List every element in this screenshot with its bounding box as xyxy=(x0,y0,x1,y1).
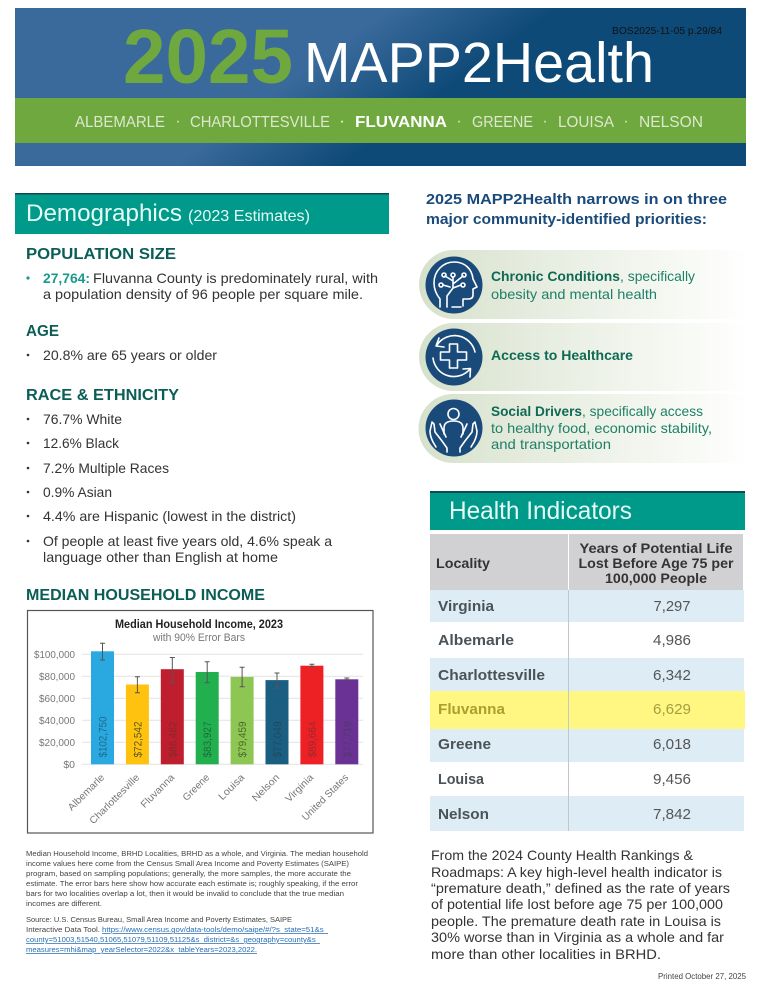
row: Fluvanna highlighted: Fluvanna xyxy=(438,701,506,718)
panel: chronic conditions priority: , specifically xyxy=(620,268,695,284)
panel: health indicators heading: Health Indicators xyxy=(449,497,632,525)
age section: AGE xyxy=(26,323,59,340)
title: MAPP2Health: MAPP2Health xyxy=(304,31,654,95)
bar value labels: $102,750 xyxy=(98,716,110,758)
locality band: · xyxy=(339,113,345,130)
row: Albemarle: 4,986 xyxy=(653,632,691,649)
category labels: Virginia xyxy=(284,772,316,805)
chart source: https://www.census.gov/data-tools/demo/saipe/#/?s_state=51&s_ xyxy=(102,925,329,934)
row: Louisa: 9,456 xyxy=(653,771,691,788)
panel: demographics heading: Demographics xyxy=(26,200,182,227)
text block: premature death explanation: 30% worse than in Virginia as a whole and far xyxy=(431,929,724,945)
population size section: 27,764: xyxy=(43,270,90,286)
bar chart: median household income: $20,000 xyxy=(39,737,75,749)
bar value labels: $89,664 xyxy=(307,722,319,758)
row: Greene: 6,018 xyxy=(653,736,691,753)
panel: chronic conditions priority: Chronic Conditions xyxy=(491,268,620,284)
locality band: · xyxy=(175,113,181,130)
age section xyxy=(26,323,217,363)
locality band: ALBEMARLE xyxy=(75,114,165,131)
bar chart: median household income: $100,000 xyxy=(34,649,75,661)
row: Charlottesville xyxy=(430,658,744,691)
panel: social drivers priority: to healthy food, economic stability, xyxy=(491,420,712,436)
bar value labels: $79,459 xyxy=(237,722,249,758)
chart source: Source: U.S. Census Bureau, Small Area Income and Poverty Estimates, SAIPE xyxy=(26,915,292,924)
category labels: Louisa xyxy=(217,772,247,803)
row: Albemarle: Albemarle xyxy=(438,632,514,649)
population size section: Fluvanna County is predominately rural, with xyxy=(93,270,378,286)
header banner xyxy=(15,8,746,166)
bar value labels xyxy=(98,716,354,758)
race and ethnicity section: 7.2% Multiple Races xyxy=(43,460,169,476)
panel: health indicators heading xyxy=(430,491,745,530)
chart source: Interactive Data Tool. xyxy=(26,925,100,934)
locality band: GREENE xyxy=(472,114,533,131)
race and ethnicity section: language other than English at home xyxy=(43,549,278,565)
bar chart: median household income: $40,000 xyxy=(39,715,75,727)
race and ethnicity section: 12.6% Black xyxy=(43,435,120,451)
bar value labels: $77,719 xyxy=(342,722,354,758)
chart footnote xyxy=(26,849,368,908)
row: Virginia xyxy=(430,590,744,622)
icon: medical cross with cycle arrows xyxy=(433,336,475,377)
table header xyxy=(430,534,743,590)
table: health indicators xyxy=(430,534,745,831)
error bars xyxy=(100,643,349,693)
print date: Printed October 27, 2025 xyxy=(658,972,747,981)
table header: Lost Before Age 75 per xyxy=(578,555,734,571)
race and ethnicity section xyxy=(26,387,332,565)
race and ethnicity section: RACE & ETHNICITY xyxy=(26,387,179,404)
locality band: · xyxy=(542,113,548,130)
category labels: Greene xyxy=(181,772,212,803)
text block: premature death explanation: more than other localities in BRHD. xyxy=(431,946,661,962)
population size section: POPULATION SIZE xyxy=(26,246,176,263)
priorities heading xyxy=(426,192,727,228)
row: Louisa: Louisa xyxy=(438,771,485,788)
panel: social drivers priority: and transportation xyxy=(491,436,611,452)
chart footnote: incomes are different. xyxy=(26,899,102,908)
panel: chronic conditions priority: obesity and mental health xyxy=(491,286,657,302)
panel: demographics heading: (2023 Estimates) xyxy=(188,208,310,225)
text block: premature death explanation: Roadmaps: A key high-level health indicator is xyxy=(431,864,722,880)
locality band: LOUISA xyxy=(558,114,614,131)
text block: premature death explanation: From the 2024 County Health Rankings & xyxy=(431,847,694,863)
priorities heading: 2025 MAPP2Health narrows in on three xyxy=(426,192,727,208)
row: Virginia: Virginia xyxy=(438,598,495,615)
text block: premature death explanation: people. The premature death rate in Louisa is xyxy=(431,913,721,929)
row: Greene xyxy=(430,729,744,762)
priorities heading: major community-identified priorities: xyxy=(426,212,707,228)
race and ethnicity section: 76.7% White xyxy=(43,411,122,427)
panel: demographics heading xyxy=(15,193,389,234)
title: 2025: 2025 xyxy=(123,14,293,100)
panel: chronic conditions priority xyxy=(419,250,762,319)
chart footnote: estimate. The error bars here show how accurate each estimate is; roughly speaking, if the error xyxy=(26,879,358,888)
race and ethnicity section: 0.9% Asian xyxy=(43,484,112,500)
icon: head with neural network xyxy=(434,262,477,307)
category labels: Charlottesville xyxy=(88,772,142,827)
bars xyxy=(91,651,358,764)
row: Greene: Greene xyxy=(438,736,491,753)
row: Albemarle xyxy=(430,622,744,658)
row: Nelson: 7,842 xyxy=(653,806,691,823)
table header: 100,000 People xyxy=(605,570,707,586)
document reference: BOS2025-11-05 p.29/84 xyxy=(612,26,722,37)
row: Charlottesville: 6,342 xyxy=(653,667,691,684)
locality band: · xyxy=(456,113,462,130)
locality band: · xyxy=(623,113,629,130)
chart source: measures=mhi&map_yearSelector=2022&x_tableYears=2023,2022. xyxy=(26,945,257,954)
chart footnote: program, based on sampling populations; generally, the more samples, the more accurate the xyxy=(26,869,351,878)
chart source xyxy=(26,915,329,954)
category labels: Fluvanna xyxy=(139,772,177,811)
category labels: Nelson xyxy=(250,772,282,804)
table header: Locality xyxy=(436,555,490,571)
row: Nelson xyxy=(430,796,744,831)
bar value labels: $72,542 xyxy=(132,722,144,758)
icon: person held in hands xyxy=(430,408,477,452)
locality band: FLUVANNA xyxy=(355,114,447,131)
population size section xyxy=(26,246,378,302)
age section: 20.8% are 65 years or older xyxy=(43,347,217,363)
row: Virginia: 7,297 xyxy=(654,598,690,615)
row: Fluvanna highlighted xyxy=(430,691,745,729)
category labels: United States xyxy=(300,772,351,823)
chart footnote: income values here come from the Census Small Area Income and Poverty Estimates (SAIPE) xyxy=(26,859,349,868)
bar chart: median household income: $80,000 xyxy=(39,671,75,683)
category labels xyxy=(66,772,351,827)
bar chart: median household income xyxy=(28,610,373,833)
chart source: county=51003,51540,51065,51079,51109,51125&s_district=&s_geography=county&s_ xyxy=(26,935,321,944)
panel: social drivers priority xyxy=(418,394,762,463)
locality band: CHARLOTTESVILLE xyxy=(190,114,330,131)
panel: social drivers priority: Social Drivers xyxy=(491,403,582,419)
locality band xyxy=(15,98,746,143)
row: Louisa xyxy=(430,762,744,796)
chart footnote: Median Household Income, BRHD Localities, BRHD as a whole, and Virginia. The median household xyxy=(26,849,368,858)
locality band: NELSON xyxy=(639,114,703,131)
category labels: Albemarle xyxy=(66,772,107,813)
row: Fluvanna highlighted: 6,629 xyxy=(653,701,691,718)
population size section: a population density of 96 people per square mile. xyxy=(43,286,363,302)
row: Charlottesville: Charlottesville xyxy=(438,667,545,684)
panel: access to healthcare priority xyxy=(419,323,762,391)
bar chart: median household income: Median Household Income, 2023 xyxy=(115,619,283,631)
table header: Years of Potential Life xyxy=(580,540,733,556)
bar chart: median household income: with 90% Error Bars xyxy=(152,632,245,644)
bar value labels: $86,462 xyxy=(167,722,179,758)
heading: median household income: MEDIAN HOUSEHOLD INCOME xyxy=(26,587,265,604)
row: Nelson: Nelson xyxy=(438,806,489,823)
text block: premature death explanation xyxy=(431,847,730,962)
bar value labels: $83,927 xyxy=(202,722,214,758)
bar value labels: $77,049 xyxy=(272,722,284,758)
panel: access to healthcare priority: Access to Healthcare xyxy=(491,347,633,363)
bar chart: median household income: $60,000 xyxy=(39,693,75,705)
bar chart: median household income: $0 xyxy=(63,759,75,771)
race and ethnicity section: Of people at least five years old, 4.6% speak a xyxy=(43,533,332,549)
race and ethnicity section: 4.4% are Hispanic (lowest in the district) xyxy=(43,508,296,524)
panel: social drivers priority: , specifically access xyxy=(582,403,703,419)
text block: premature death explanation: of potential life lost before age 75 per 100,000 xyxy=(431,896,723,912)
text block: premature death explanation: “premature death,” defined as the rate of years xyxy=(431,880,730,896)
chart footnote: bars for two localities overlap a lot, then it would be invalid to conclude that the true median xyxy=(26,889,344,898)
